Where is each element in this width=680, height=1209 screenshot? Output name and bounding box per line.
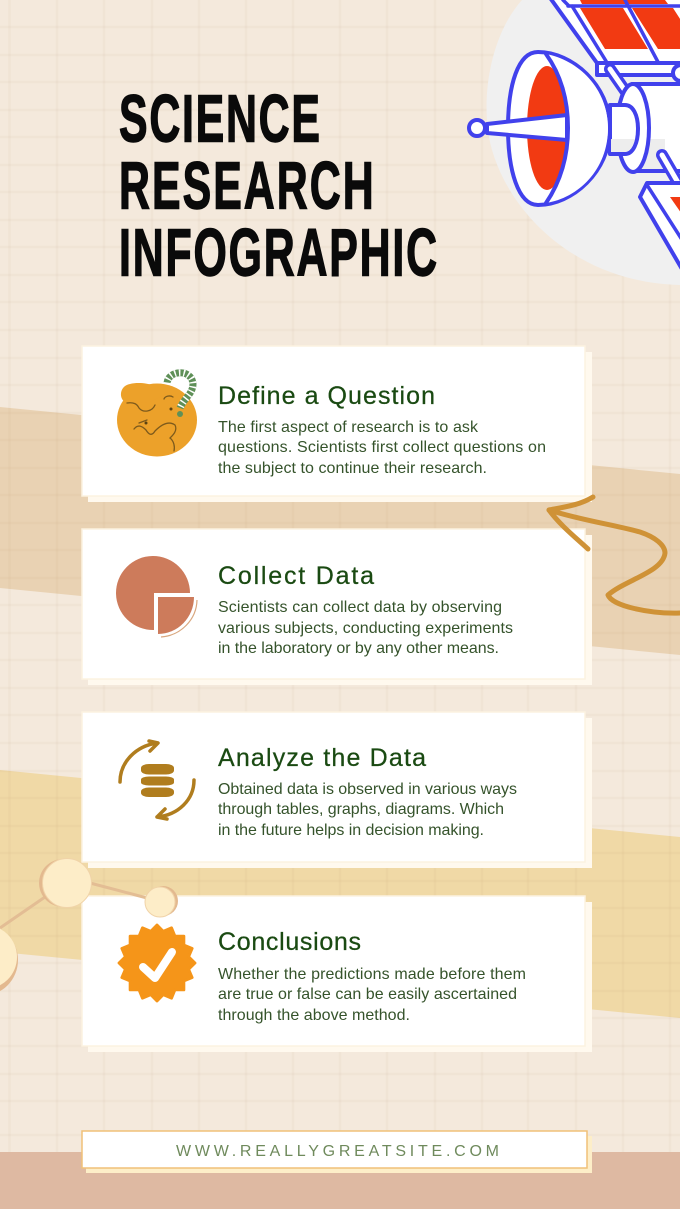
icon: verified badge	[119, 925, 195, 1001]
decoration: molecule nodes	[0, 858, 178, 996]
heading: Collect Data	[218, 562, 374, 590]
panel: define a question	[82, 346, 592, 502]
body text: Scientists can collect data by observing	[218, 599, 502, 616]
body text: through tables, graphs, diagrams. Which	[218, 801, 504, 818]
body text: the subject to continue their research.	[218, 460, 487, 477]
body text	[218, 599, 513, 657]
body text: Obtained data is observed in various ways	[218, 781, 517, 798]
bottom band	[0, 1152, 680, 1209]
panel: collect data	[82, 529, 592, 685]
title	[119, 81, 437, 290]
body text: The first aspect of research is to ask	[218, 419, 479, 436]
icon: pie chart	[116, 556, 197, 637]
title: INFOGRAPHIC	[119, 215, 437, 290]
body text: various subjects, conducting experiments	[218, 620, 513, 637]
heading: Analyze the Data	[218, 744, 426, 772]
body text: are true or false can be easily ascertained	[218, 986, 517, 1003]
icon: database cycle	[120, 741, 194, 819]
body text	[218, 781, 517, 839]
illustration: satellite	[469, 0, 680, 300]
footer: website bar: WWW.REALLYGREATSITE.COM	[176, 1143, 499, 1160]
arrow: hand-drawn squiggle	[549, 497, 680, 613]
body text: Whether the predictions made before them	[218, 966, 526, 983]
body text	[218, 419, 546, 477]
title: SCIENCE	[119, 81, 320, 156]
heading: Conclusions	[218, 928, 361, 956]
body text: questions. Scientists first collect questions on	[218, 439, 546, 456]
body text	[218, 966, 526, 1024]
icon: thinking face	[117, 373, 197, 456]
footer: website bar	[82, 1131, 592, 1173]
panel: analyze the data	[82, 712, 592, 868]
body text: in the future helps in decision making.	[218, 822, 484, 839]
body text: in the laboratory or by any other means.	[218, 640, 499, 657]
panel: conclusions	[82, 896, 592, 1052]
title: RESEARCH	[119, 148, 374, 223]
body text: through the above method.	[218, 1007, 410, 1024]
heading: Define a Question	[218, 382, 435, 410]
